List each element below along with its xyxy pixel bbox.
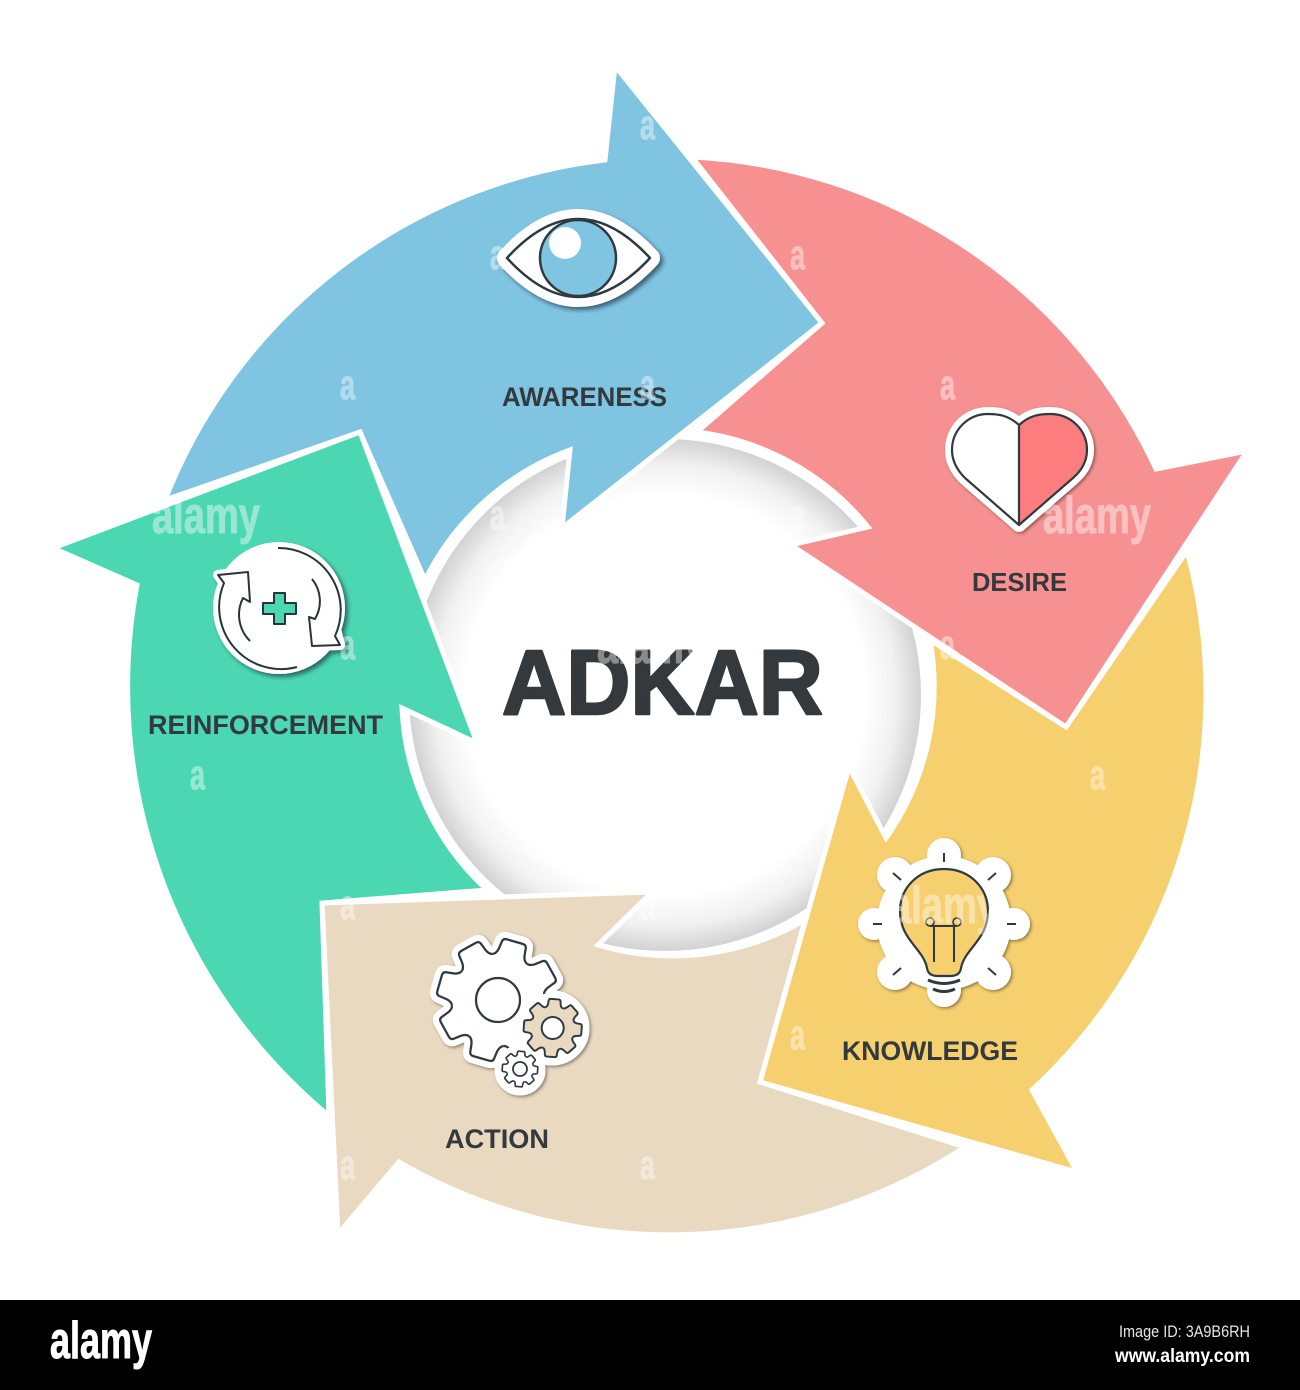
watermark overlay: alamy <box>597 617 705 675</box>
watermark overlay: a <box>790 231 805 278</box>
arrow: knowledge <box>760 551 1206 1172</box>
watermark overlay: a <box>190 751 205 798</box>
panel: reinforcement <box>53 432 487 1116</box>
watermark overlay: a <box>490 491 505 538</box>
watermark overlay: a <box>940 621 955 668</box>
watermark overlay: a <box>640 881 655 928</box>
small gear <box>501 1050 539 1088</box>
watermark overlay: alamy <box>152 487 260 545</box>
icon: light bulb <box>858 838 1030 1007</box>
sticker backing for small gears <box>496 993 587 1093</box>
arrow: reinforcement <box>53 432 487 1116</box>
watermark overlay: a <box>790 751 805 798</box>
watermark overlay: a <box>340 1141 355 1188</box>
label: knowledge: KNOWLEDGE <box>842 1036 1018 1066</box>
watermark overlay: a <box>640 101 655 148</box>
watermark overlay <box>152 101 1151 1188</box>
watermark overlay: a <box>340 361 355 408</box>
panel: action <box>322 892 965 1235</box>
medium gear <box>522 997 584 1059</box>
website: www.alamy.com <box>1114 1346 1250 1367</box>
watermark overlay: alamy <box>890 877 998 935</box>
watermark overlay: a <box>790 491 805 538</box>
watermark overlay: a <box>340 881 355 928</box>
watermark overlay: a <box>940 361 955 408</box>
arrow: awareness <box>165 66 822 580</box>
watermark overlay: a <box>1090 751 1105 798</box>
icon: heart <box>952 414 1087 525</box>
label: reinforcement: REINFORCEMENT <box>148 710 384 740</box>
label: awareness: AWARENESS <box>502 382 667 412</box>
watermark overlay: alamy <box>1043 487 1151 545</box>
arrow: desire <box>692 157 1247 727</box>
panel: desire <box>692 157 1247 727</box>
title: ADKAR: ADKAR <box>502 632 823 734</box>
label: action: ACTION <box>445 1124 549 1154</box>
central hub circle <box>409 439 921 951</box>
arrow: action <box>322 892 965 1235</box>
icon: gears <box>423 925 589 1095</box>
footer bar <box>0 1300 1300 1390</box>
icon: refresh with plus <box>213 542 345 674</box>
watermark overlay: a <box>640 361 655 408</box>
panel: awareness <box>165 66 822 580</box>
footer logo: alamy <box>50 1312 152 1370</box>
panel: knowledge <box>760 551 1206 1172</box>
watermark overlay: a <box>490 231 505 278</box>
watermark overlay: a <box>640 1141 655 1188</box>
watermark overlay: a <box>790 1011 805 1058</box>
label: desire: DESIRE <box>972 567 1067 597</box>
icon: eye <box>507 219 650 297</box>
image id: Image ID: 3A9B6RH <box>1119 1322 1250 1341</box>
watermark overlay: a <box>340 621 355 668</box>
big gear <box>423 925 573 1075</box>
